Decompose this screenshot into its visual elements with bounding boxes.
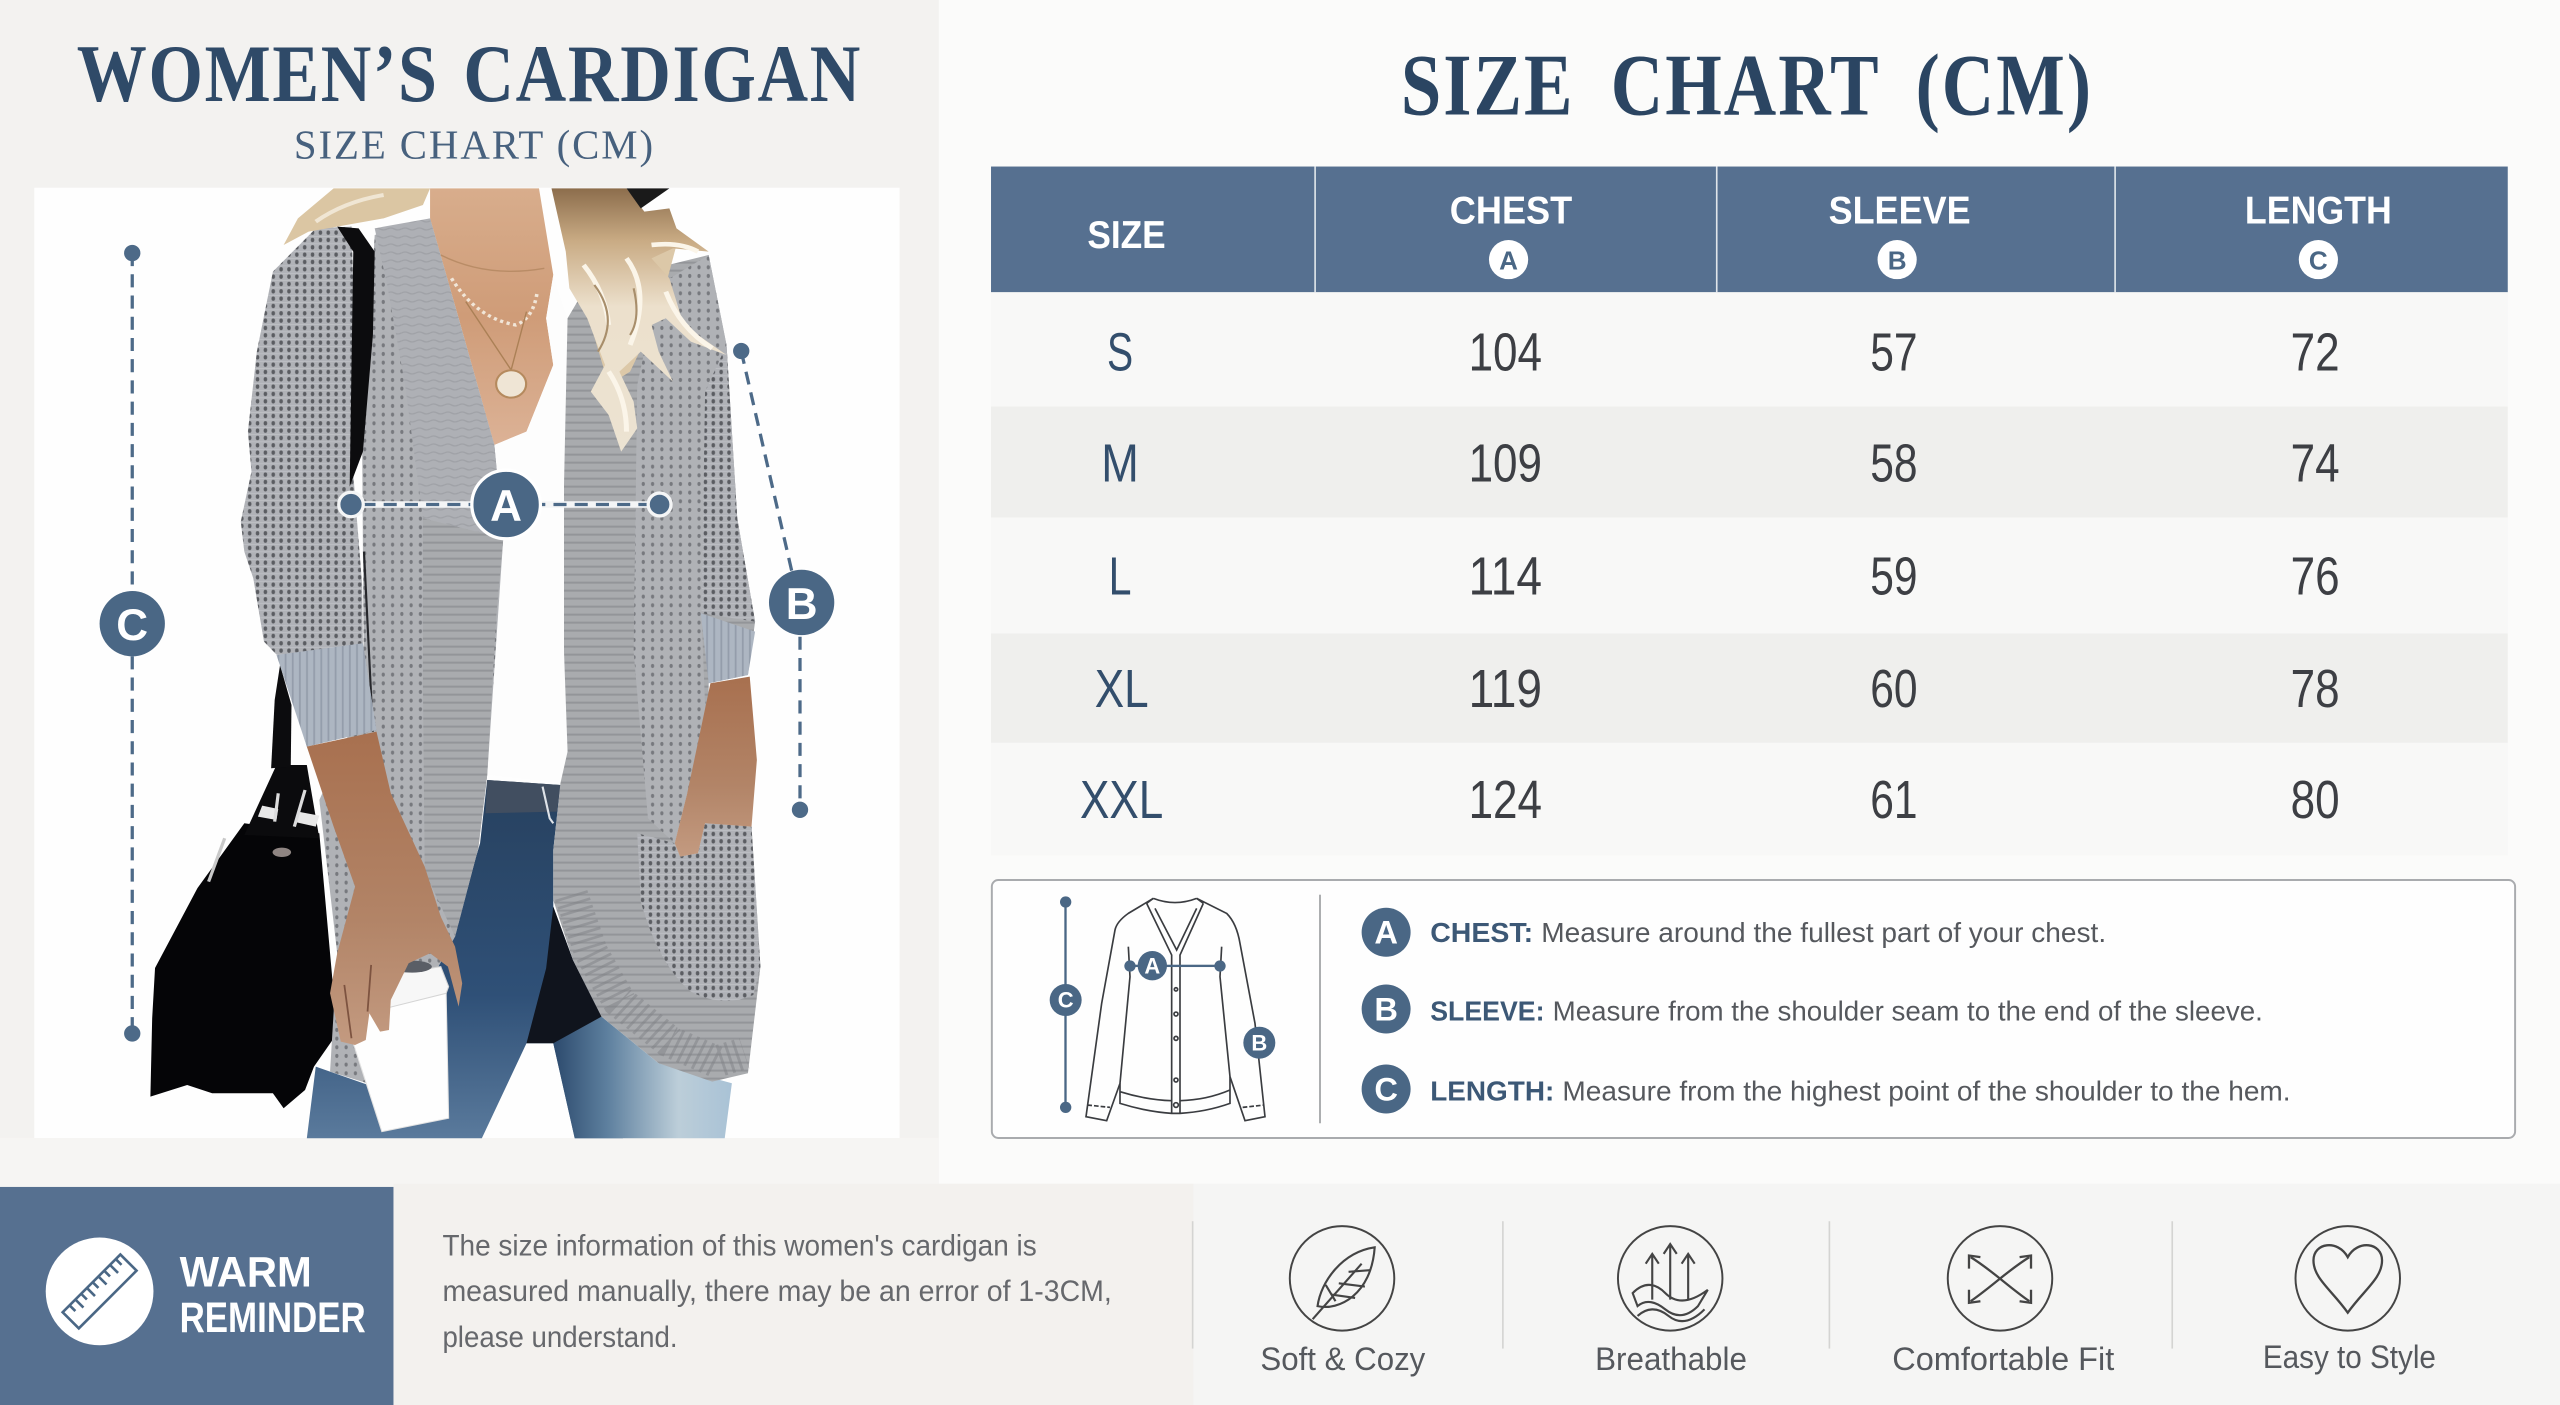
icon: cardigan line drawing: A <box>1144 953 1160 978</box>
measurement A chest line <box>339 470 671 539</box>
necklaces and pendant <box>441 255 544 398</box>
legend item: sleeve: SLEEVE: <box>1430 995 1544 1026</box>
icon: ruler <box>63 1254 137 1328</box>
legend item: length: C <box>1374 1070 1398 1107</box>
left forearm and hand <box>307 732 462 1045</box>
reminder text: The size information of this women's cardigan is <box>442 1230 1037 1263</box>
row XL: 119 <box>1469 659 1542 719</box>
warm reminder block: WARM <box>180 1249 312 1296</box>
legend item: chest <box>1362 908 2106 957</box>
feature: comfortable fit <box>1892 1226 2114 1377</box>
row S: 104 <box>1469 323 1542 383</box>
cardigan body left front <box>319 218 503 1085</box>
warm reminder block: REMINDER <box>180 1294 366 1341</box>
measurement A chest line: A <box>490 482 522 531</box>
jeans <box>307 780 732 1138</box>
row M: 74 <box>2291 434 2340 494</box>
legend item: sleeve: B <box>1374 990 1398 1027</box>
measurement C length line: C <box>116 601 148 650</box>
reminder text <box>442 1230 1112 1354</box>
skin and neck <box>430 188 553 445</box>
row XL: 60 <box>1870 659 1918 719</box>
icon: feather <box>1313 1247 1375 1319</box>
row XXL: 80 <box>2291 770 2340 830</box>
row L: 114 <box>1469 546 1542 606</box>
handbag <box>150 665 337 1108</box>
legend item: length <box>1362 1064 2291 1113</box>
row S: S <box>1107 323 1133 383</box>
table header: C <box>2309 245 2328 275</box>
icon: cardigan line drawing: C <box>1058 988 1074 1013</box>
warm reminder block <box>0 1187 393 1405</box>
cardigan left sleeve <box>241 227 376 747</box>
bottom band <box>0 1184 2560 1405</box>
row S: 57 <box>1870 323 1918 383</box>
photo of model wearing cardigan <box>34 188 900 1138</box>
legend item: chest: A <box>1374 914 1398 951</box>
row M: M <box>1101 434 1139 494</box>
cardigan right front <box>553 255 760 1082</box>
feature: breathable: Breathable <box>1595 1340 1747 1377</box>
row M: 58 <box>1870 434 1918 494</box>
table header: SLEEVE <box>1829 190 1971 233</box>
table header: CHEST <box>1450 190 1572 233</box>
heading: size chart: SIZE CHART (CM) <box>1401 36 2093 134</box>
row XL: XL <box>1095 659 1149 719</box>
table header: B <box>1888 245 1907 275</box>
shoulder bag strap <box>337 227 375 487</box>
icon: cardigan line drawing: B <box>1251 1030 1267 1055</box>
subtitle: SIZE CHART (CM) <box>294 122 653 167</box>
icon: heart <box>2313 1245 2382 1313</box>
icon: cardigan line drawing <box>1050 896 1275 1121</box>
legend item: sleeve <box>1362 984 2263 1033</box>
panel: product photo and title <box>0 0 939 1187</box>
row L: L <box>1109 546 1131 606</box>
icon: crossing arrows <box>1969 1256 2031 1303</box>
legend item: length: Measure from the highest point of the shoulder to the hem. <box>1562 1075 2291 1106</box>
feature: breathable <box>1595 1226 1747 1377</box>
feature: easy to style <box>2263 1226 2436 1375</box>
row L: 76 <box>2291 546 2340 606</box>
reminder text: please understand. <box>442 1321 678 1354</box>
feature: comfortable fit: Comfortable Fit <box>1892 1340 2114 1377</box>
measurement B sleeve line <box>733 343 834 818</box>
row L: 59 <box>1870 546 1918 606</box>
row XXL: 61 <box>1870 770 1918 830</box>
measurement C length line <box>100 245 165 1042</box>
legend item: sleeve: Measure from the shoulder seam to the end of the sleeve. <box>1553 995 2263 1026</box>
table header: SIZE <box>1087 214 1166 257</box>
table header: LENGTH <box>2245 190 2392 233</box>
feature: easy to style: Easy to Style <box>2263 1338 2436 1375</box>
row M <box>991 407 2508 518</box>
white tee <box>487 275 568 783</box>
coffee cup <box>353 961 449 1132</box>
size table <box>991 167 2508 856</box>
legend item: chest: Measure around the fullest part of your chest. <box>1541 917 2106 948</box>
icon: airflow arrows over fabric <box>1633 1244 1708 1321</box>
row S <box>991 292 2508 407</box>
table header <box>991 167 2508 292</box>
row XL: 78 <box>2291 659 2340 719</box>
row L <box>991 518 2508 633</box>
blonde hair <box>284 188 727 452</box>
row S: 72 <box>2291 323 2340 383</box>
right forearm and hand <box>675 677 757 857</box>
row M: 109 <box>1469 434 1542 494</box>
title: WOMEN’S CARDIGAN <box>77 28 862 119</box>
row XXL: 124 <box>1469 770 1542 830</box>
measurement B sleeve line: B <box>786 580 818 629</box>
legend item: chest: CHEST: <box>1430 917 1533 948</box>
legend item: length: LENGTH: <box>1430 1075 1554 1106</box>
reminder text: measured manually, there may be an error of 1-3CM, <box>442 1275 1112 1308</box>
row XL <box>991 633 2508 743</box>
feature: soft and cozy: Soft & Cozy <box>1260 1340 1426 1377</box>
panel: how to measure legend <box>992 880 2515 1138</box>
table header: A <box>1499 245 1518 275</box>
row XXL: XXL <box>1080 770 1163 830</box>
row XXL <box>991 743 2508 856</box>
feature: soft and cozy <box>1260 1226 1426 1377</box>
